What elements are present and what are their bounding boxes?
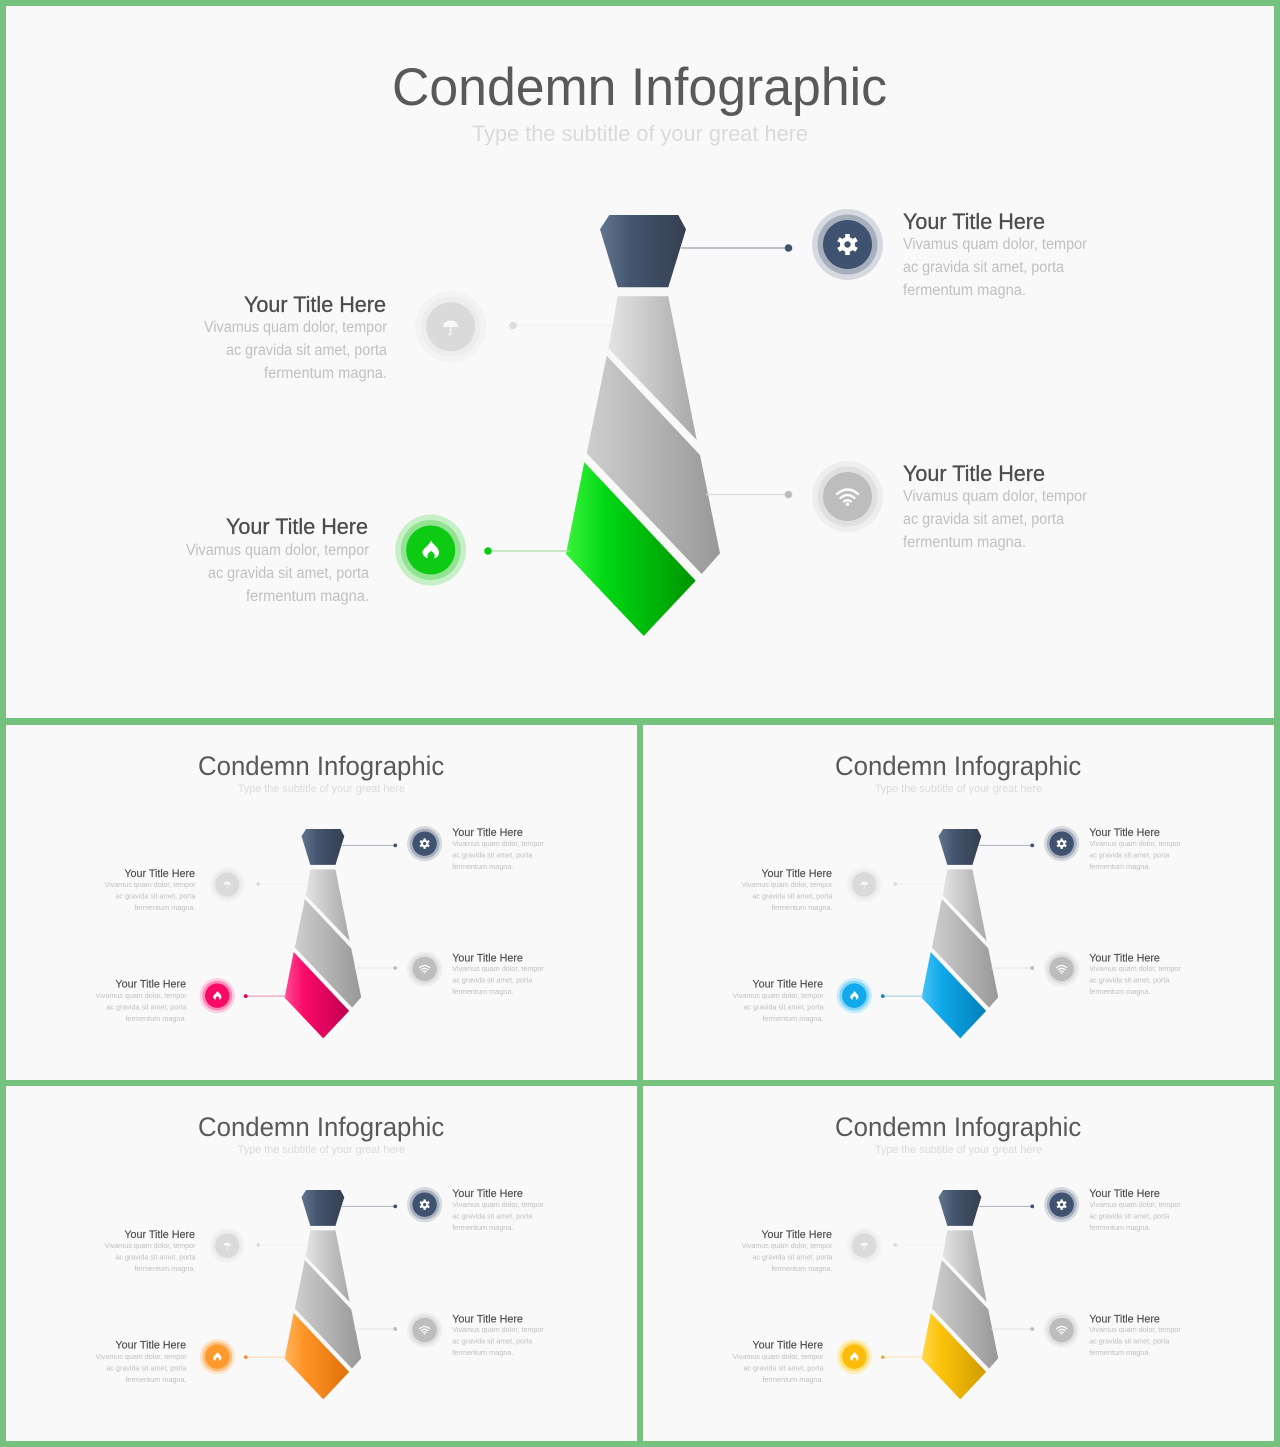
connector: umbrella	[509, 322, 612, 329]
text block: top left: Your Title Here	[124, 1229, 195, 1241]
text block: bottom right: ac gravida sit amet, porta	[1089, 976, 1170, 985]
text block: top left: Vivamus quam dolor, tempor	[104, 1241, 196, 1250]
connector: gear	[681, 244, 792, 252]
icon: wifi	[407, 951, 442, 987]
icon: gear	[407, 1187, 442, 1222]
text block: bottom left	[96, 1340, 187, 1384]
text block: bottom right: Vivamus quam dolor, tempor	[452, 1325, 544, 1334]
text block: top left: ac gravida sit amet, porta	[115, 1253, 196, 1262]
connector: flame	[244, 1355, 287, 1359]
text block: bottom right	[1089, 1313, 1181, 1357]
subtitle: Type the subtitle of your great here	[238, 1144, 405, 1156]
icon: flame	[200, 978, 235, 1013]
subtitle: Type the subtitle of your great here	[472, 121, 808, 146]
text block: bottom right: Your Title Here	[903, 461, 1045, 486]
text block: top left: fermentum magna.	[771, 903, 833, 912]
text block: bottom left: Your Title Here	[752, 1340, 823, 1352]
text block: bottom left: Vivamus quam dolor, tempor	[186, 542, 369, 559]
text block: bottom left: ac gravida sit amet, porta	[743, 1003, 824, 1012]
text block: bottom left: ac gravida sit amet, porta	[106, 1003, 187, 1012]
text block: top right: Your Title Here	[452, 827, 523, 839]
title: Condemn Infographic	[835, 751, 1081, 781]
text block: top right	[1089, 827, 1181, 871]
text block: top right: fermentum magna.	[452, 1223, 513, 1232]
text block: bottom right: Vivamus quam dolor, tempor	[903, 488, 1087, 505]
text block: top right: Your Title Here	[1089, 827, 1160, 839]
text block: bottom left	[96, 979, 187, 1023]
icon: flame	[837, 1339, 872, 1374]
tie	[922, 829, 998, 1038]
text block: top left: ac gravida sit amet, porta	[752, 1253, 833, 1262]
text block: bottom left: fermentum magna.	[125, 1375, 187, 1384]
text block: bottom left: Your Title Here	[752, 979, 823, 991]
tie	[285, 1190, 361, 1399]
text block: bottom left: Vivamus quam dolor, tempor	[96, 991, 187, 1000]
icon: flame	[200, 1339, 235, 1374]
text block: top right: Vivamus quam dolor, tempor	[1089, 1200, 1181, 1209]
text block: bottom right: Vivamus quam dolor, tempor	[452, 964, 544, 973]
text block: bottom right	[1089, 952, 1181, 996]
subtitle: Type the subtitle of your great here	[238, 783, 405, 795]
icon: umbrella	[847, 1228, 882, 1263]
title: Condemn Infographic	[392, 58, 887, 117]
text block: top right: ac gravida sit amet, porta	[452, 1211, 533, 1220]
text block: bottom left	[733, 979, 824, 1023]
text block: top right: fermentum magna.	[903, 282, 1026, 299]
text block: top left: ac gravida sit amet, porta	[226, 342, 387, 359]
text block: bottom right: fermentum magna.	[1089, 1348, 1150, 1357]
connector: gear	[979, 843, 1034, 847]
panel: pink variant	[96, 751, 544, 1038]
text block: top left: Your Title Here	[761, 1229, 832, 1241]
tie	[285, 829, 361, 1038]
text block: top left: Vivamus quam dolor, tempor	[741, 1241, 833, 1250]
icon: umbrella	[847, 867, 882, 902]
text block: bottom right: Your Title Here	[1089, 1313, 1160, 1325]
text block: top right: ac gravida sit amet, porta	[903, 259, 1064, 276]
connector: wifi	[354, 1327, 397, 1331]
title: Condemn Infographic	[835, 1112, 1081, 1142]
panel: main green slide	[186, 58, 1087, 636]
text block: bottom left	[186, 514, 369, 605]
connector: umbrella	[256, 882, 307, 886]
text block: bottom left: Vivamus quam dolor, tempor	[96, 1352, 187, 1361]
text block: bottom left: Your Title Here	[115, 1340, 186, 1352]
title: Condemn Infographic	[198, 1112, 444, 1142]
connector: flame	[881, 994, 924, 998]
text block: top right: Vivamus quam dolor, tempor	[903, 236, 1087, 253]
text block: bottom left: Vivamus quam dolor, tempor	[733, 991, 824, 1000]
text block: bottom right	[452, 1313, 544, 1357]
connector: wifi	[354, 966, 397, 970]
text block: top right: ac gravida sit amet, porta	[452, 850, 533, 859]
text block: top right	[452, 827, 544, 871]
connector: wifi	[706, 491, 792, 498]
text block: bottom left: Your Title Here	[115, 979, 186, 991]
text block: top left: Your Title Here	[124, 868, 195, 880]
icon: umbrella	[210, 1228, 245, 1263]
text block: top left: fermentum magna.	[134, 903, 196, 912]
text block: bottom left: fermentum magna.	[762, 1014, 824, 1023]
text block: top left: fermentum magna.	[264, 365, 387, 382]
text block: bottom left: fermentum magna.	[246, 588, 369, 605]
text block: top left: fermentum magna.	[134, 1264, 196, 1273]
connector: gear	[979, 1204, 1034, 1208]
text block: bottom left: ac gravida sit amet, porta	[743, 1364, 824, 1373]
text block: top right: Vivamus quam dolor, tempor	[452, 1200, 544, 1209]
text block: bottom right: fermentum magna.	[452, 1348, 513, 1357]
connector: wifi	[991, 966, 1034, 970]
text block: top left	[104, 868, 196, 912]
text block: bottom right: Your Title Here	[452, 952, 523, 964]
text block: top left: Vivamus quam dolor, tempor	[204, 319, 387, 336]
text block: top left: Your Title Here	[761, 868, 832, 880]
icon: flame	[837, 978, 872, 1013]
icon: wifi	[1044, 951, 1079, 987]
text block: bottom left: ac gravida sit amet, porta	[106, 1364, 187, 1373]
text block: bottom right: Vivamus quam dolor, tempor	[1089, 964, 1181, 973]
tie	[922, 1190, 998, 1399]
icon: umbrella	[415, 291, 486, 362]
text block: top right: ac gravida sit amet, porta	[1089, 850, 1170, 859]
connector: flame	[244, 994, 287, 998]
text block: top right	[452, 1188, 544, 1232]
text block: bottom right: fermentum magna.	[1089, 987, 1150, 996]
text block: top right: ac gravida sit amet, porta	[1089, 1211, 1170, 1220]
text block: top left: fermentum magna.	[771, 1264, 833, 1273]
text block: bottom left	[733, 1340, 824, 1384]
text block: bottom left: Vivamus quam dolor, tempor	[733, 1352, 824, 1361]
text block: top right: fermentum magna.	[452, 862, 513, 871]
text block: top right: Your Title Here	[903, 209, 1045, 234]
icon: umbrella	[210, 867, 245, 902]
text block: top left: ac gravida sit amet, porta	[752, 892, 833, 901]
text block: top left: Your Title Here	[244, 292, 386, 317]
connector: wifi	[991, 1327, 1034, 1331]
text block: bottom left: ac gravida sit amet, porta	[208, 565, 369, 582]
connector: gear	[342, 1204, 397, 1208]
subtitle: Type the subtitle of your great here	[875, 1144, 1042, 1156]
text block: bottom right: Your Title Here	[1089, 952, 1160, 964]
icon: gear	[1044, 1187, 1079, 1222]
text block: top right: Vivamus quam dolor, tempor	[1089, 839, 1181, 848]
text block: top left	[741, 1229, 833, 1273]
text block: top right	[1089, 1188, 1181, 1232]
connector: umbrella	[893, 882, 944, 886]
text block: bottom left: fermentum magna.	[125, 1014, 187, 1023]
text block: bottom right: Your Title Here	[452, 1313, 523, 1325]
text block: bottom right: fermentum magna.	[903, 534, 1026, 551]
connector: umbrella	[893, 1243, 944, 1247]
icon: wifi	[407, 1312, 442, 1348]
connector: flame	[881, 1355, 924, 1359]
panel: yellow variant	[733, 1112, 1181, 1399]
icon: wifi	[1044, 1312, 1079, 1348]
text block: top right: Vivamus quam dolor, tempor	[452, 839, 544, 848]
icon: wifi	[812, 461, 883, 532]
text block: bottom right: ac gravida sit amet, porta	[452, 1337, 533, 1346]
text block: top left	[204, 292, 387, 382]
text block: top right: fermentum magna.	[1089, 862, 1150, 871]
connector: gear	[342, 843, 397, 847]
icon: gear	[407, 826, 442, 861]
text block: bottom left: Your Title Here	[226, 514, 368, 539]
icon: gear	[812, 209, 883, 280]
tie	[566, 215, 720, 636]
text block: top right: Your Title Here	[452, 1188, 523, 1200]
text block: bottom right: fermentum magna.	[452, 987, 513, 996]
text block: bottom right: ac gravida sit amet, porta	[903, 511, 1064, 528]
text block: top left: Vivamus quam dolor, tempor	[741, 880, 833, 889]
text block: top right: fermentum magna.	[1089, 1223, 1150, 1232]
text block: bottom right: ac gravida sit amet, porta	[452, 976, 533, 985]
subtitle: Type the subtitle of your great here	[875, 783, 1042, 795]
text block: top left: ac gravida sit amet, porta	[115, 892, 196, 901]
panel: blue variant	[733, 751, 1181, 1038]
text block: top left	[741, 868, 833, 912]
text block: top left	[104, 1229, 196, 1273]
text block: bottom right	[903, 461, 1087, 551]
connector: flame	[484, 547, 570, 555]
text block: bottom right: Vivamus quam dolor, tempor	[1089, 1325, 1181, 1334]
icon: gear	[1044, 826, 1079, 861]
panel: orange variant	[96, 1112, 544, 1399]
text block: bottom left: fermentum magna.	[762, 1375, 824, 1384]
text block: top right	[903, 209, 1087, 299]
connector: umbrella	[256, 1243, 307, 1247]
icon: flame	[395, 514, 466, 586]
text block: bottom right: ac gravida sit amet, porta	[1089, 1337, 1170, 1346]
title: Condemn Infographic	[198, 751, 444, 781]
text block: top left: Vivamus quam dolor, tempor	[104, 880, 196, 889]
text block: top right: Your Title Here	[1089, 1188, 1160, 1200]
text block: bottom right	[452, 952, 544, 996]
